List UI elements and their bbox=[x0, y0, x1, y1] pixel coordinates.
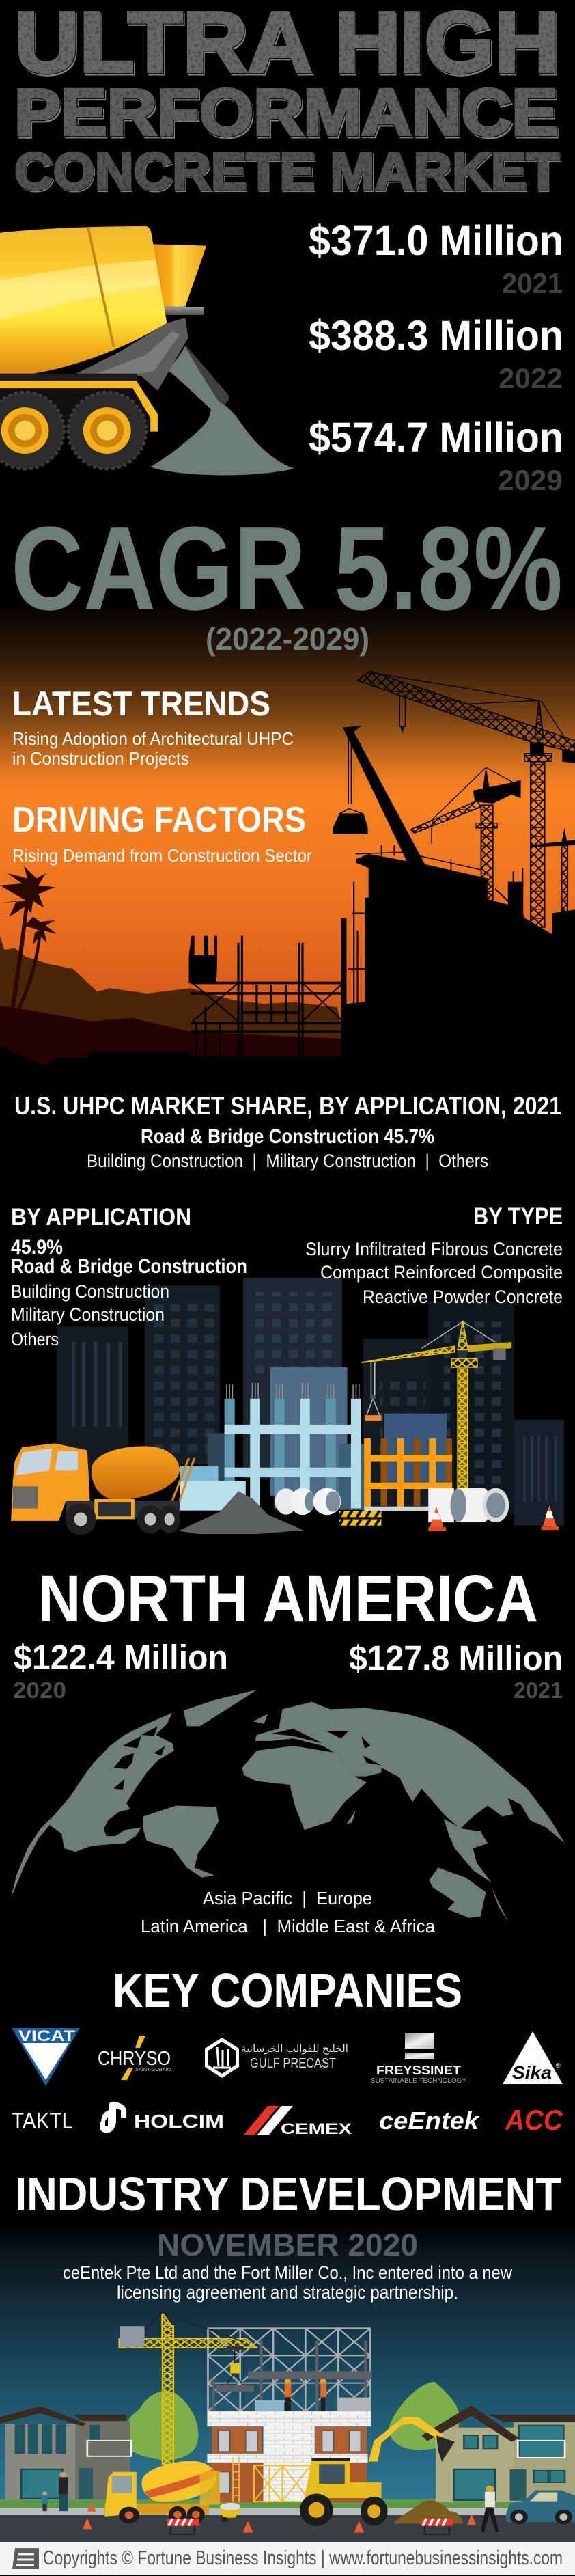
market size figures bbox=[309, 217, 563, 496]
yellow tower crane bbox=[361, 1321, 511, 1490]
title line: CONCRETE MARKET: CONCRETE MARKET bbox=[15, 144, 560, 202]
South East Asia bbox=[444, 1819, 492, 1882]
dirt pile bbox=[394, 2500, 463, 2524]
key companies heading: KEY COMPANIES bbox=[113, 1964, 462, 2017]
fender bbox=[0, 381, 158, 432]
world map globe bbox=[11, 1690, 565, 1921]
Hudson bay and lakes bbox=[113, 1726, 165, 1790]
development date: NOVEMBER 2020 bbox=[157, 2228, 418, 2262]
pipe bbox=[165, 307, 204, 315]
brick building bbox=[207, 2411, 371, 2502]
yellow crane bbox=[120, 2312, 257, 2464]
wheel front bbox=[0, 392, 64, 469]
logo: Holcim bbox=[100, 2102, 224, 2133]
gravel pile bbox=[179, 1491, 304, 1534]
truck wheels bbox=[66, 1504, 180, 1535]
U.S. market share block bbox=[14, 1092, 561, 1171]
value 2020: $122.4 Million bbox=[14, 1638, 228, 1677]
Africa bbox=[242, 1746, 367, 1830]
hazard barrier bbox=[339, 1511, 381, 1526]
ladder bbox=[172, 1458, 195, 1501]
logo: Gulf Precast bbox=[205, 2038, 348, 2078]
scaffold frame bbox=[208, 2328, 370, 2411]
logo: ceEntek: ceEntek bbox=[379, 2107, 480, 2135]
regions line two: Latin America | Middle East & Africa bbox=[141, 1916, 436, 1936]
value 2022: $388.3 Million bbox=[309, 312, 563, 359]
leading share: 45.9% bbox=[11, 1236, 63, 1259]
tree right bbox=[389, 2382, 460, 2450]
segment: others: Others bbox=[11, 1329, 59, 1349]
title line: PERFORMANCE: PERFORMANCE bbox=[14, 76, 558, 149]
other regions bbox=[141, 1888, 436, 1936]
low frame structure bbox=[191, 936, 343, 1056]
house right bbox=[422, 2405, 575, 2502]
logo: Taktl: TAKTL bbox=[12, 2108, 73, 2133]
wheel rear bbox=[68, 392, 146, 469]
type: compact: Compact Reinforced Composite bbox=[320, 1262, 563, 1283]
North America bbox=[11, 1713, 174, 1897]
regions line one: Asia Pacific | Europe bbox=[203, 1888, 372, 1908]
tower crane 2 bbox=[410, 767, 521, 901]
value 2029: $574.7 Million bbox=[309, 414, 563, 461]
wheelbarrow bbox=[219, 2503, 242, 2522]
other applications: Building Construction | Military Construction | Others bbox=[87, 1151, 488, 1171]
British Isles bbox=[253, 1714, 268, 1724]
drum seam bbox=[88, 227, 113, 347]
windscreen bbox=[16, 1448, 52, 1475]
year 2021: 2021 bbox=[502, 267, 563, 299]
title line: PERFORMANCE: PERFORMANCE bbox=[14, 76, 558, 149]
logo: Holcim: HOLCIM bbox=[134, 2111, 224, 2132]
title line: PERFORMANCE: PERFORMANCE bbox=[16, 78, 559, 151]
palm tree 1 bbox=[0, 866, 57, 1010]
Oceania islands bbox=[492, 1887, 508, 1921]
driver text: Rising Demand from Construction Sector bbox=[12, 845, 312, 866]
development description bbox=[63, 2262, 512, 2303]
cones bbox=[83, 2503, 476, 2533]
leading segment: Road & Bridge Construction bbox=[11, 1255, 247, 1278]
segment: military: Military Construction bbox=[11, 1304, 165, 1325]
main building mass bbox=[0, 854, 575, 1066]
traffic cone 1 bbox=[428, 1507, 446, 1531]
workers on scaffold bbox=[285, 2379, 326, 2411]
value 2021: $127.8 Million bbox=[349, 1639, 563, 1677]
logo: Freyssinet bbox=[371, 2033, 466, 2085]
road bbox=[0, 2515, 575, 2542]
logo: Gulf Precast: الخليج للقوالب الخرسانية bbox=[241, 2043, 348, 2055]
title line: CONCRETE MARKET: CONCRETE MARKET bbox=[14, 143, 559, 201]
heading: by application: BY APPLICATION bbox=[11, 1204, 191, 1231]
grass bbox=[0, 2499, 575, 2508]
regional values bbox=[13, 1638, 563, 1703]
mountains bbox=[0, 936, 345, 1042]
drum highlight bbox=[0, 260, 160, 320]
title bbox=[14, 0, 561, 202]
value 2021: $371.0 Million bbox=[309, 217, 563, 264]
logo: Cemex bbox=[244, 2106, 352, 2137]
logo: Sika: ® bbox=[556, 2062, 561, 2069]
logo: Freyssinet: SUSTAINABLE TECHNOLOGY bbox=[371, 2077, 466, 2085]
latest trends bbox=[12, 685, 294, 769]
tower crane 3 bbox=[530, 828, 575, 912]
car bbox=[506, 2491, 575, 2524]
road barrier left bbox=[167, 2519, 199, 2535]
panel: night sky background bbox=[0, 2224, 575, 2542]
inland seas bbox=[271, 1729, 381, 1766]
concrete frame bbox=[225, 1383, 361, 1508]
chute bbox=[185, 344, 229, 411]
scaffold lines bbox=[348, 868, 524, 1004]
support frame bbox=[72, 318, 188, 391]
foreground hill bbox=[0, 1006, 345, 1066]
leading application: Road & Bridge Construction 45.7% bbox=[141, 1125, 434, 1148]
heading: driving factors: DRIVING FACTORS bbox=[12, 800, 306, 840]
sidewalk bbox=[0, 2508, 575, 2515]
concrete pipes group 2 bbox=[428, 1488, 509, 1522]
steel columns and beams bbox=[212, 2341, 372, 2411]
pedestrians bbox=[42, 2472, 68, 2511]
illustration: city construction site bbox=[11, 1278, 564, 1535]
mobile crane with load bbox=[333, 726, 425, 868]
year 2020: 2020 bbox=[13, 1677, 66, 1703]
cab bbox=[11, 1443, 90, 1521]
mixer truck bbox=[11, 1443, 195, 1535]
segment: building: Building Construction bbox=[11, 1281, 169, 1302]
description line two: licensing agreement and strategic partnership. bbox=[117, 2282, 458, 2303]
logo: Cemex: CEMEX bbox=[281, 2120, 352, 2137]
South America bbox=[143, 1805, 219, 1878]
heading: by type: BY TYPE bbox=[473, 1203, 563, 1230]
hopper bbox=[152, 244, 206, 307]
mixer truck bbox=[104, 2461, 220, 2523]
silhouette: construction skyline at sunset bbox=[0, 671, 575, 1066]
driving factors bbox=[12, 800, 312, 866]
logo: ACC: ACC bbox=[505, 2104, 563, 2136]
orange frame bbox=[364, 1438, 452, 1511]
logo: Freyssinet: FREYSSINET bbox=[376, 2064, 461, 2077]
year 2022: 2022 bbox=[499, 362, 563, 394]
logo: Chryso: CHRYSO bbox=[98, 2048, 171, 2070]
Australia bbox=[429, 1868, 486, 1918]
backhoe loader bbox=[300, 2417, 455, 2526]
wheels arch dark bbox=[0, 387, 150, 430]
Eurasia bbox=[255, 1702, 565, 1844]
low concrete slabs bbox=[180, 1466, 219, 1481]
Greenland bbox=[183, 1690, 257, 1726]
grille bbox=[13, 1486, 38, 1508]
description line one: ceEntek Pte Ltd and the Fort Miller Co., Inc entered into a new bbox=[63, 2262, 512, 2283]
logo: Chryso bbox=[98, 2036, 171, 2080]
tree left bbox=[122, 2391, 198, 2461]
materials on roof bbox=[255, 2400, 284, 2411]
footer background bbox=[0, 2542, 575, 2575]
trend text line two: in Construction Projects bbox=[12, 748, 189, 769]
concrete pipes group 1 bbox=[275, 1488, 341, 1515]
type: slurry: Slurry Infiltrated Fibrous Concrete bbox=[305, 1239, 563, 1259]
logo: Vicat bbox=[12, 2027, 80, 2086]
by type list bbox=[305, 1203, 563, 1307]
footer bbox=[0, 2542, 575, 2575]
background towers bbox=[57, 1278, 564, 1526]
year 2021: 2021 bbox=[514, 1677, 563, 1703]
panel: sunset construction background bbox=[0, 601, 575, 1066]
logo: Chryso: SAINT-GOBAIN bbox=[135, 2066, 171, 2072]
mixer drum bbox=[0, 226, 167, 378]
Madagascar bbox=[346, 1811, 356, 1824]
logo: Sika: Sika bbox=[512, 2062, 552, 2083]
woman engineer bbox=[480, 2486, 499, 2532]
poured concrete pile bbox=[150, 346, 294, 475]
logos bbox=[12, 2027, 563, 2137]
traffic cone 2 bbox=[542, 1505, 559, 1530]
by application list bbox=[11, 1204, 247, 1349]
logo: Sika bbox=[503, 2031, 563, 2084]
heading: latest trends: LATEST TRENDS bbox=[12, 685, 270, 723]
illustration: street construction scene bbox=[0, 2312, 575, 2542]
Fortune Business Insights logo bbox=[12, 2548, 39, 2569]
CAGR period: (2022-2029) bbox=[206, 621, 369, 657]
logo: Gulf Precast: GULF PRECAST bbox=[250, 2056, 336, 2071]
logo: Vicat: VICAT bbox=[18, 2027, 76, 2044]
chassis bbox=[0, 374, 137, 381]
year 2029: 2029 bbox=[498, 464, 563, 496]
house left bbox=[0, 2406, 131, 2500]
mid blue buildings bbox=[270, 1367, 348, 1496]
tower crane 1 bbox=[358, 671, 575, 927]
illustration: yellow cement mixer pouring concrete bbox=[0, 226, 294, 475]
column stub block bbox=[189, 936, 217, 983]
road barrier right bbox=[421, 2519, 453, 2535]
title line: CONCRETE MARKET: CONCRETE MARKET bbox=[14, 143, 559, 201]
mixer drum bbox=[92, 1447, 180, 1501]
trend text line one: Rising Adoption of Architectural UHPC bbox=[12, 728, 294, 749]
